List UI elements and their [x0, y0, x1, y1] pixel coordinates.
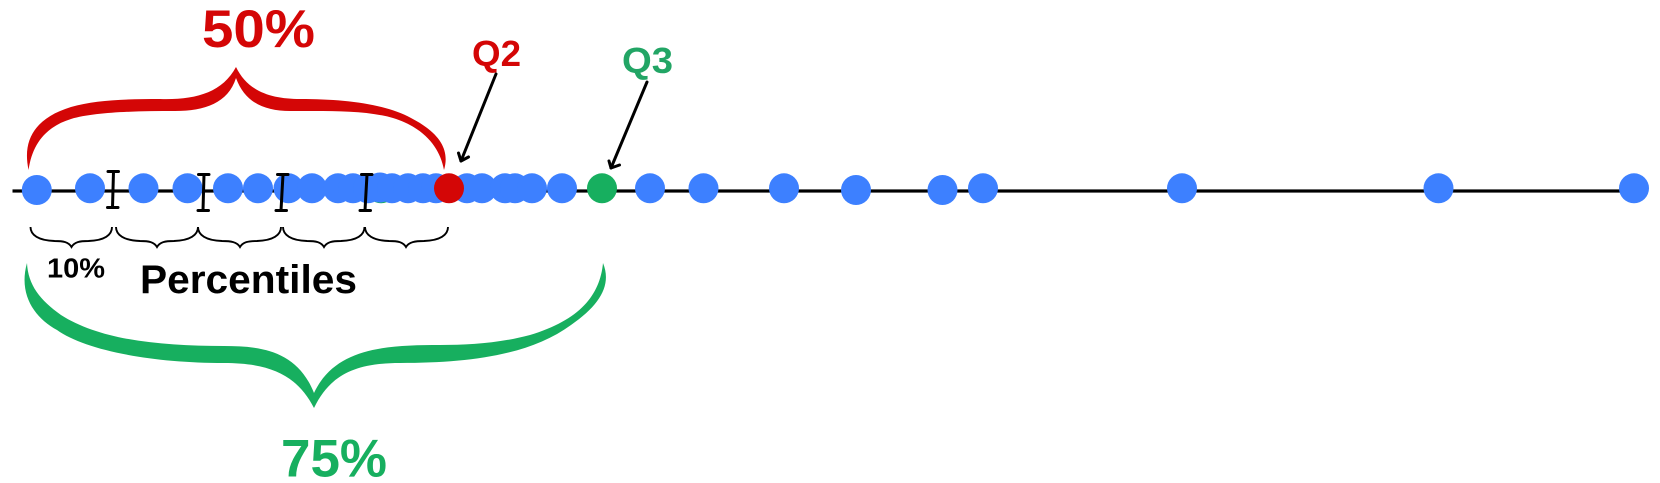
- green brace spanning three quarters: [25, 263, 606, 408]
- label: 10%: 10%: [47, 252, 105, 284]
- arrow: Q2 to median point: [458, 74, 496, 161]
- label: Percentiles: Percentiles: [140, 258, 357, 302]
- heading: 50%: 50%: [202, 0, 315, 59]
- label: Q3: Q3: [622, 40, 673, 81]
- label: Q2: Q2: [472, 33, 521, 74]
- small percentile braces: [30, 227, 448, 247]
- red brace spanning first half: [27, 67, 446, 170]
- blue data points: [22, 172, 1649, 205]
- number line axis: [12, 189, 1634, 193]
- arrow: Q3 to third quartile point: [609, 82, 647, 168]
- percentile tick marks: [108, 172, 372, 210]
- green third quartile point: [587, 173, 617, 203]
- red median point: [434, 173, 464, 203]
- hidden green data point: [366, 173, 396, 203]
